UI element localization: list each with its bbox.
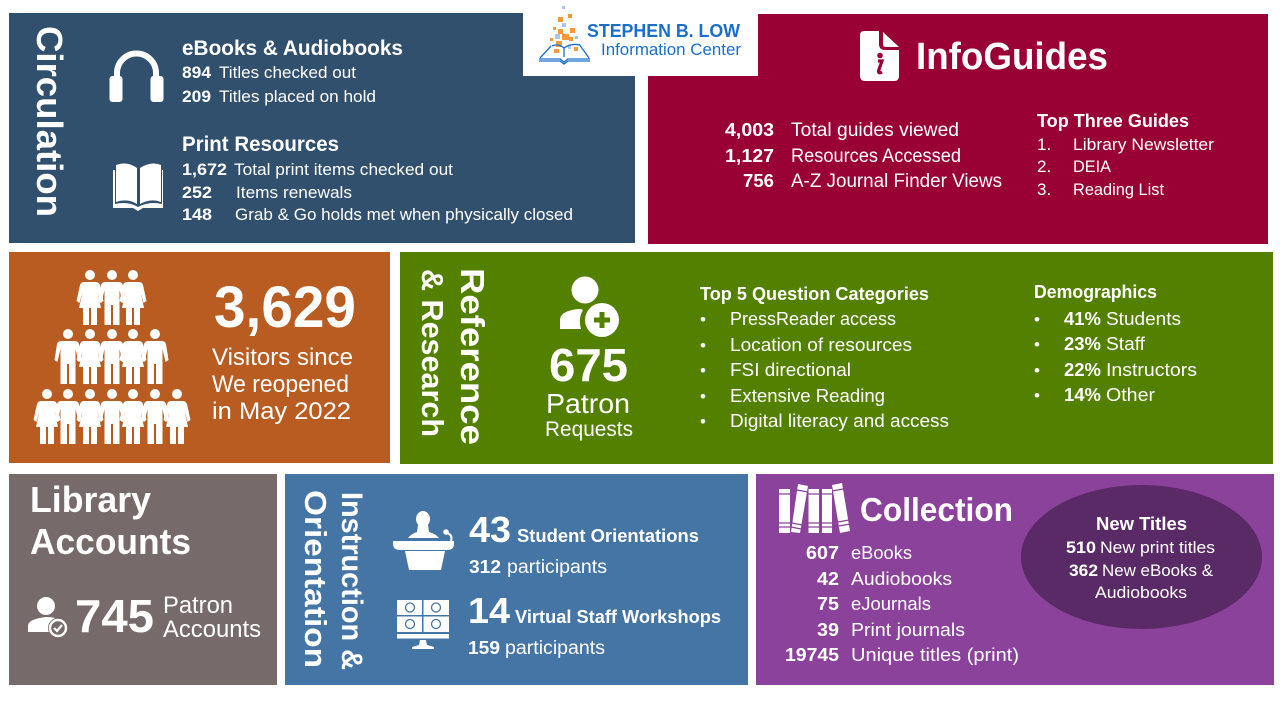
stat: student orientations: participants (507, 557, 607, 578)
list: demographics: • (1034, 361, 1040, 380)
stat: grab and go: Grab & Go holds met when physically closed (235, 205, 573, 224)
stat: total print items: Total print items checked out (234, 160, 453, 179)
list: top three guides: 2. (1037, 157, 1051, 176)
list: demographics: Staff (1106, 334, 1146, 354)
list: collection totals (785, 543, 1019, 665)
icon: info file (860, 31, 899, 81)
text: visitors caption: in May 2022 (212, 398, 351, 425)
panel: instruction and orientation (285, 474, 748, 685)
list: collection totals: eJournals (851, 594, 931, 614)
list: top question categories: Extensive Reading (730, 386, 885, 406)
stat: grab and go: 148 (182, 205, 212, 224)
stat: total guides viewed: 4,003 (725, 120, 774, 140)
list: demographics: • (1034, 335, 1040, 354)
stat: journal finder views: A-Z Journal Finder Views (791, 171, 1002, 192)
heading: reference and research: & Research (415, 269, 450, 437)
stat: total print items: 1,672 (182, 160, 227, 179)
text: visitors caption (212, 344, 353, 425)
list: top question categories: Digital literacy and access (730, 411, 949, 431)
panel: reference and research (400, 252, 1273, 464)
stat: virtual staff workshops: 159 (468, 638, 500, 658)
callout: new titles: New Titles (1096, 514, 1187, 534)
list: top question categories: • (700, 387, 706, 406)
heading: infoguides: InfoGuides (916, 36, 1108, 78)
list: collection totals: Print journals (851, 620, 965, 640)
icon: headphones (110, 54, 164, 102)
heading: ebooks and audiobooks: eBooks & Audiobooks (182, 37, 403, 60)
heading: library accounts: Library (30, 479, 151, 520)
list: top question categories: Location of resources (730, 335, 912, 355)
stat: resources accessed: Resources Accessed (791, 146, 961, 167)
stat: patron accounts: 745 (75, 590, 154, 642)
stat: titles checked out: Titles checked out (219, 63, 356, 82)
callout: new titles: 362 (1069, 561, 1098, 580)
list: top three guides: Reading List (1073, 180, 1164, 199)
icon: user check (28, 597, 68, 638)
stat: journal finder views: 756 (743, 171, 774, 191)
stat: student orientations: 312 (469, 557, 501, 577)
list: top three guides: 1. (1037, 135, 1051, 154)
heading: reference and research (415, 268, 491, 445)
logo (523, 0, 758, 76)
list: demographics: • (1034, 310, 1040, 329)
list: demographics: 14% (1064, 385, 1101, 405)
heading: instruction and orientation: Instruction & (335, 492, 368, 670)
list: collection totals: eBooks (851, 543, 912, 563)
panel: library accounts (9, 474, 277, 685)
heading: instruction and orientation: Orientation (298, 490, 333, 668)
list: demographics: • (1034, 386, 1040, 405)
heading: library accounts: Accounts (30, 521, 191, 562)
stat: titles placed on hold: Titles placed on hold (219, 87, 376, 106)
panel: visitors (9, 252, 390, 463)
list: demographics: Students (1106, 309, 1181, 329)
stat: item renewals: Items renewals (236, 183, 352, 202)
list: demographics: 41% (1064, 309, 1101, 329)
list: collection totals: Audiobooks (851, 569, 952, 589)
callout: new titles: 510 (1066, 538, 1096, 557)
list: top question categories: • (700, 361, 706, 380)
heading: instruction and orientation (298, 490, 368, 670)
panel: infoguides (648, 14, 1268, 244)
stat: patron requests: Requests (545, 418, 633, 441)
panel: circulation (9, 13, 635, 243)
icon: open book (113, 164, 163, 211)
icon: book with pixels (539, 6, 590, 64)
list: top question categories: PressReader access (730, 309, 896, 329)
list: collection totals: 19745 (785, 645, 839, 665)
stat: virtual staff workshops: Virtual Staff Workshops (515, 607, 721, 627)
list: top question categories: • (700, 412, 706, 431)
stat: patron requests: 675 (549, 339, 628, 391)
callout: new titles: New eBooks & (1102, 561, 1214, 580)
stat: patron accounts: Patron (163, 592, 233, 619)
stat: patron requests (545, 339, 633, 441)
text: visitors caption: We reopened (212, 371, 349, 398)
stat: titles placed on hold: 209 (182, 87, 211, 106)
list: demographics: 22% (1064, 360, 1101, 380)
stat: resources accessed: 1,127 (725, 146, 774, 166)
callout: new titles (1021, 485, 1262, 629)
stat: titles checked out: 894 (182, 63, 212, 82)
list: top three guides: DEIA (1073, 157, 1112, 176)
heading: reference and research: Reference (454, 268, 491, 445)
list: collection totals: 607 (806, 543, 839, 563)
stat: patron requests: Patron (546, 388, 630, 419)
list: top three guides: 3. (1037, 180, 1051, 199)
list: top question categories: • (700, 310, 706, 329)
list: top three guides (1037, 111, 1214, 199)
list: collection totals: 42 (817, 569, 839, 589)
stat: item renewals: 252 (182, 183, 212, 202)
logo subtitle: Information Center (601, 41, 742, 59)
stat: patron accounts (75, 590, 261, 643)
heading: library accounts (30, 479, 191, 562)
list: top question categories: • (700, 336, 706, 355)
list: demographics: 23% (1064, 334, 1101, 354)
list: top three guides: Library Newsletter (1073, 135, 1214, 154)
stat: visitors number: 3,629 (214, 275, 356, 340)
list: demographics: Other (1106, 385, 1155, 405)
list: top question categories: Top 5 Question Categories (700, 284, 929, 304)
list: top question categories: FSI directional (730, 360, 851, 380)
stat: virtual staff workshops: 14 (468, 590, 510, 631)
stat: virtual staff workshops (468, 590, 721, 659)
list: demographics: Demographics (1034, 282, 1157, 302)
list: top question categories (700, 284, 949, 431)
stat: patron accounts: Accounts (163, 616, 261, 643)
stat: resources accessed (725, 146, 961, 167)
callout: new titles: Audiobooks (1095, 583, 1187, 602)
list: top three guides: Top Three Guides (1037, 111, 1189, 131)
icon: virtual meeting monitor (397, 600, 449, 649)
list: demographics: Instructors (1106, 360, 1197, 380)
panel: collection (756, 474, 1274, 685)
text: visitors caption: Visitors since (212, 344, 353, 371)
icon: user plus (560, 276, 619, 337)
list: collection totals: Unique titles (print) (851, 645, 1019, 665)
stat: item renewals (182, 183, 352, 202)
stat: student orientations: 43 (469, 509, 511, 550)
icon: books (779, 483, 850, 533)
heading: collection: Collection (860, 491, 1013, 528)
icon: crowd pyramid (34, 270, 190, 444)
logo text: STEPHEN B. LOW (587, 21, 740, 41)
callout: new titles: New print titles (1100, 538, 1215, 557)
heading: print resources: Print Resources (182, 133, 339, 156)
list: collection totals: 75 (817, 594, 839, 614)
stat: virtual staff workshops: participants (505, 638, 605, 659)
stat: student orientations (469, 509, 699, 578)
stat: total guides viewed: Total guides viewed (791, 120, 959, 141)
list: demographics (1034, 282, 1197, 405)
heading: circulation: Circulation (29, 26, 70, 217)
list: collection totals: 39 (817, 620, 839, 640)
stat: student orientations: Student Orientations (517, 526, 699, 546)
icon: speaker at podium (393, 511, 454, 570)
